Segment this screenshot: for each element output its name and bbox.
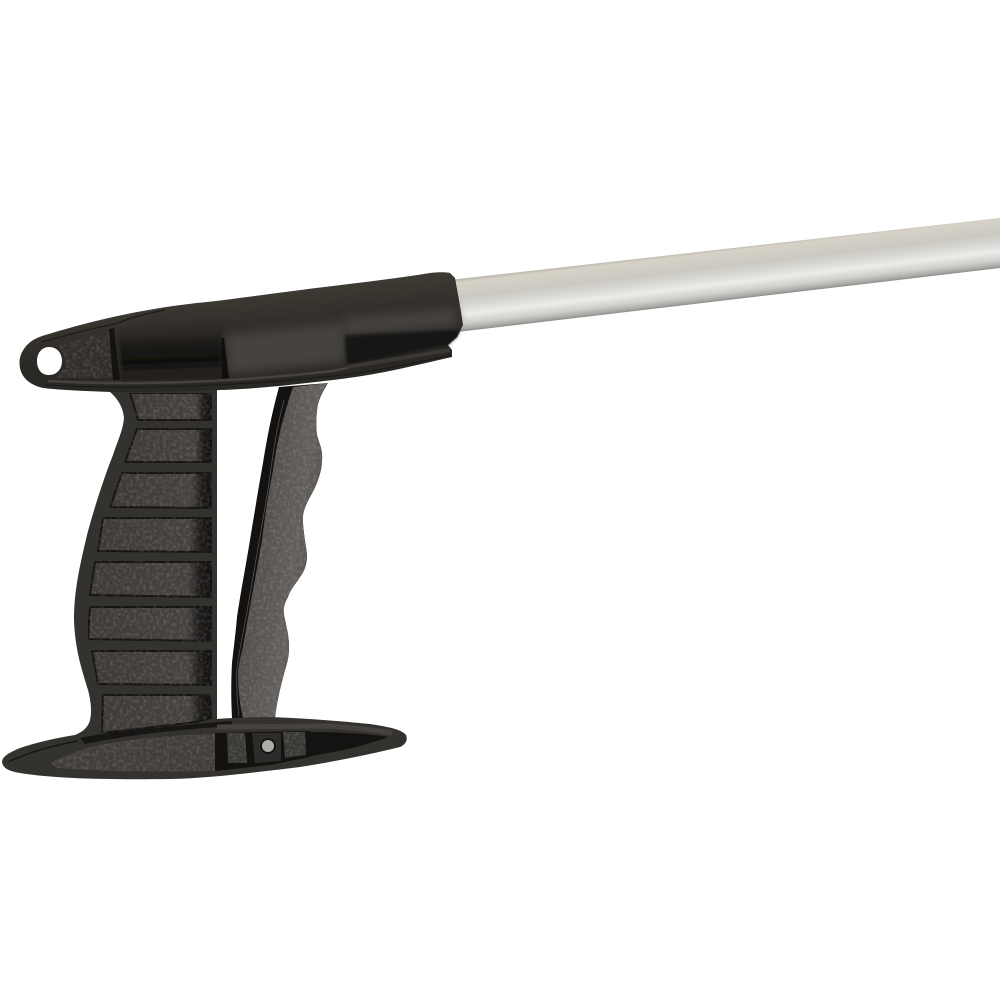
grip panel 3 (110, 473, 212, 508)
base left ridge lines (8, 741, 78, 762)
grip and base body (2, 385, 407, 779)
base dark cavity to tip (305, 732, 388, 757)
lower cavity ledge (122, 367, 224, 380)
grip panel 6 (88, 607, 212, 641)
aluminium tube (440, 218, 1000, 334)
trigger grey face (238, 383, 328, 718)
base dark centre and lower floor (215, 731, 310, 771)
trigger thin highlight line (237, 400, 284, 716)
grip panel 4 (98, 518, 212, 552)
pin block (252, 733, 281, 763)
dark vertical rib (109, 328, 120, 380)
base dark shadow band (80, 721, 232, 744)
base block right of pin (283, 732, 306, 758)
grip panel 8 (102, 695, 211, 733)
upper rim ridge line (42, 310, 165, 342)
base block left of pin (227, 733, 247, 763)
dark right cavity (345, 330, 460, 365)
sloped upper ridge (117, 310, 225, 350)
grip panel 5 (90, 562, 212, 597)
grip panels (88, 393, 212, 733)
lower rim lines (48, 368, 347, 383)
grip panel 7 (92, 651, 212, 685)
upper housing (19, 272, 463, 392)
grip panel 2 (125, 429, 212, 462)
rivet pin (260, 738, 276, 754)
patch notch (221, 338, 229, 379)
highlight band on housing (345, 308, 457, 336)
grip panel 1 (130, 393, 212, 420)
trigger lever (231, 383, 328, 718)
base rim highlight (217, 726, 392, 733)
base left recess (50, 734, 215, 772)
lower lip of housing (347, 350, 450, 367)
eye panel (55, 331, 113, 378)
textured grey patch (225, 322, 345, 374)
dark left cavity (120, 336, 226, 380)
